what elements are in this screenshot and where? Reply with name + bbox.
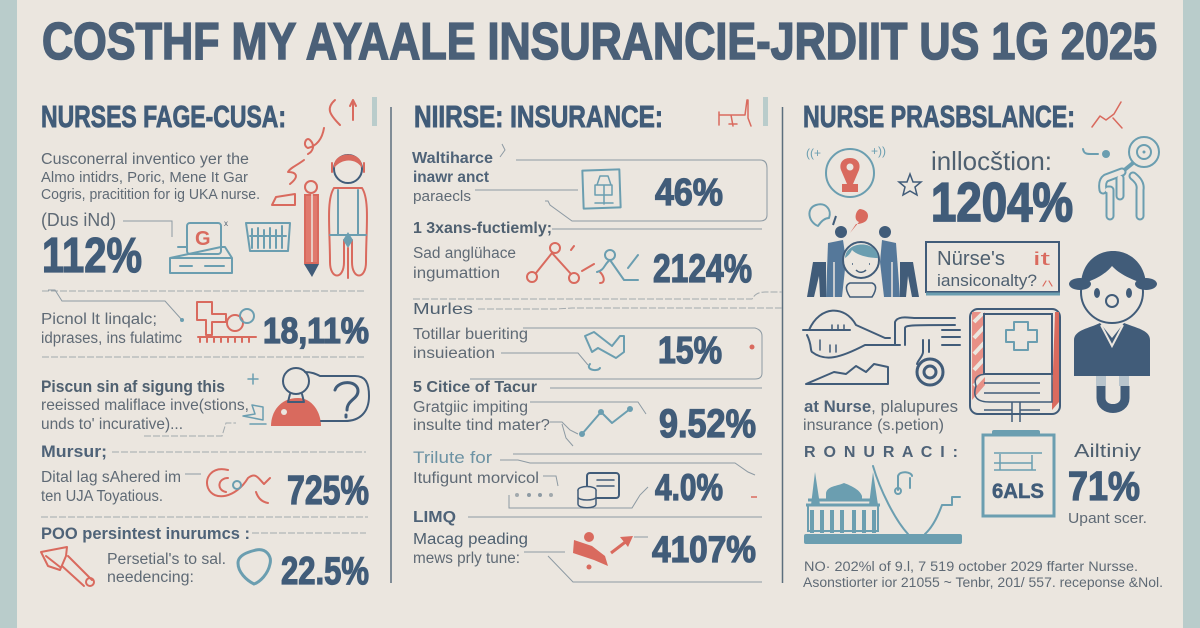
text block: trilute: Trilute for [413, 449, 493, 467]
label: persistent: POO persintest inurumcs : [41, 524, 250, 543]
icon: red zigzag [1092, 102, 1122, 128]
stat: 725%: 725% [287, 467, 369, 513]
stat: 22.5%: 22.5% [281, 550, 369, 593]
callout: nurse's box [926, 242, 1060, 294]
text block: dital: ten UJA Toyatious. [41, 488, 163, 505]
icon: stethoscope [1083, 137, 1159, 216]
heading: prasbslance: NURSE PRASBSLANCE: [803, 99, 1075, 134]
stat: 9.52%: 9.52% [659, 402, 756, 446]
icon: computer [170, 219, 232, 273]
icon: computer: x [224, 219, 228, 228]
label: mursur: Mursur; [41, 442, 107, 461]
label: ronuraci: R O N U R A C I : [804, 444, 958, 461]
text block: walliharce: Waltiharce [412, 150, 493, 167]
stat: 4107%: 4107% [652, 529, 756, 570]
stat: 46%: 46% [655, 172, 723, 214]
label: 3xans: 1 3xans-fuctiemly; [413, 220, 552, 237]
text block: macag: Macag peading [413, 531, 528, 548]
icon: person and arrow [573, 532, 633, 570]
text block: dital: Dital lag sAhered im [41, 469, 181, 486]
text block: walliharce: inawr anct [413, 169, 489, 186]
text block: macag: mews prly tune: [413, 550, 520, 567]
icon: person with question [271, 368, 369, 426]
icon: squiggles [272, 100, 356, 205]
stat: 15%: 15% [658, 330, 722, 372]
text block: sad: Sad anglühace [413, 245, 516, 262]
stat: 4.0%: 4.0% [655, 467, 723, 508]
icon: basket [246, 223, 290, 251]
footer note: NO· 202%l of 9.l, 7 519 october 2029 ffarter Nursse. [804, 559, 1138, 574]
text block: gratgiic: insulte tind mater? [413, 417, 550, 434]
text block: walliharce: paraecls [413, 188, 471, 205]
label: dus ind: (Dus iNd) [41, 210, 116, 230]
text block: piscun: unds to' incurative)... [41, 416, 183, 433]
icon: clipboard: 6ALS [992, 480, 1044, 503]
icon: location pin [806, 144, 886, 197]
text block: walliharce [412, 150, 493, 205]
text block: dital [41, 469, 181, 505]
text block: piscun: reeissed maliflace inve(stions, [41, 397, 249, 414]
label: inflation: inllocštion: [931, 146, 1052, 176]
icon: location pin: ((+ [806, 146, 821, 160]
label: limq: LIMQ [413, 509, 456, 526]
icon: clipboard [983, 430, 1054, 516]
icon: computer: G [195, 228, 211, 250]
text block: picnol [41, 311, 182, 347]
text block: intro [41, 151, 260, 203]
label: ailtiniy: Ailtiniy [1074, 441, 1141, 461]
text block: intro: Almo intidrs, Poric, Mene It Gar [41, 169, 248, 186]
icon: medical book [970, 309, 1060, 422]
text block: picnol: Picnol lt linqalc; [41, 311, 157, 328]
illustration: building and curve [804, 466, 962, 544]
panel: nurses [41, 99, 369, 593]
text block: piscun: Piscun sin af sigung this [41, 378, 225, 396]
icon: star [899, 174, 921, 195]
text block: persetial [107, 551, 226, 586]
text block: sad: ingumattion [413, 265, 500, 282]
text block: picnol: idprases, ins fulatimc [41, 330, 182, 347]
text block: piscun [41, 378, 249, 433]
callout: nurse's box: Nürse's [937, 248, 1005, 270]
stat: 18,11%: 18,11% [263, 310, 369, 351]
text block: macag [413, 531, 528, 567]
label: citice: 5 Citice of Tacur [413, 379, 537, 396]
icon: pencil [304, 181, 319, 277]
footer note: Asonstiorter ior 21055 ~ Tenbr, 201/ 557. receponse &Nol. [803, 575, 1163, 590]
text block: at nurse: at Nurse, plalupures [804, 398, 958, 416]
stat: 2124%: 2124% [653, 247, 752, 291]
text block: sad [413, 245, 516, 282]
icon: heart [238, 550, 270, 584]
icon: network [527, 243, 638, 283]
text block: trilute: Itufigunt morvicol [413, 470, 539, 487]
icon: nurse figure [329, 154, 367, 278]
text block: gratgiic [413, 399, 550, 434]
stat: 112%: 112% [42, 229, 142, 283]
icon: instrument and pipes [803, 311, 960, 385]
icon: speech bubble and key [809, 204, 868, 233]
text block: persetial: needencing: [107, 569, 194, 586]
callout: nurse's box: iansiconalty? [937, 272, 1037, 290]
stat: 71%: 71% [1068, 463, 1140, 509]
icon: location pin: +)) [871, 144, 886, 158]
text block: persetial: Persetial's to sal. [107, 551, 226, 568]
panel: prasbslance [803, 99, 1163, 590]
icon: tool [585, 332, 624, 370]
text block: intro: Cogris, pracitition for ig UKA nurse. [41, 186, 260, 203]
text block: totillar: insuieation [413, 345, 495, 362]
icon: hammer [41, 547, 94, 586]
heading: insurance: NIIRSE: INSURANCE: [414, 99, 663, 134]
heading: nurses: NURSES FAGE-CUSA: [41, 99, 286, 134]
icon: spiral [207, 469, 270, 503]
text block: totillar: Totillar bueriting [413, 326, 528, 343]
label: upant: Upant scer. [1068, 510, 1147, 527]
panel: insurance [412, 99, 782, 582]
icon: scales and apples [197, 302, 256, 342]
footer note [803, 559, 1163, 590]
label: murles: Murles [413, 301, 473, 318]
icon: trend line [579, 406, 633, 437]
stat: 1204%: 1204% [931, 171, 1073, 233]
icon: group of people [807, 226, 919, 297]
text block: gratgiic: Gratgiic impiting [413, 399, 528, 416]
text block: trilute [413, 449, 539, 487]
text block: at nurse: insurance (s.petion) [803, 417, 944, 434]
callout: nurse's box: it [1033, 249, 1050, 269]
icon: character with magnet [1069, 251, 1157, 408]
icon: database and note [515, 473, 619, 508]
text block: intro: Cusconerral inventico yer the [41, 151, 249, 168]
text block: totillar [413, 326, 528, 362]
text block: at nurse [803, 398, 958, 434]
icon: red chair [719, 100, 751, 126]
icon: document building [582, 169, 621, 209]
